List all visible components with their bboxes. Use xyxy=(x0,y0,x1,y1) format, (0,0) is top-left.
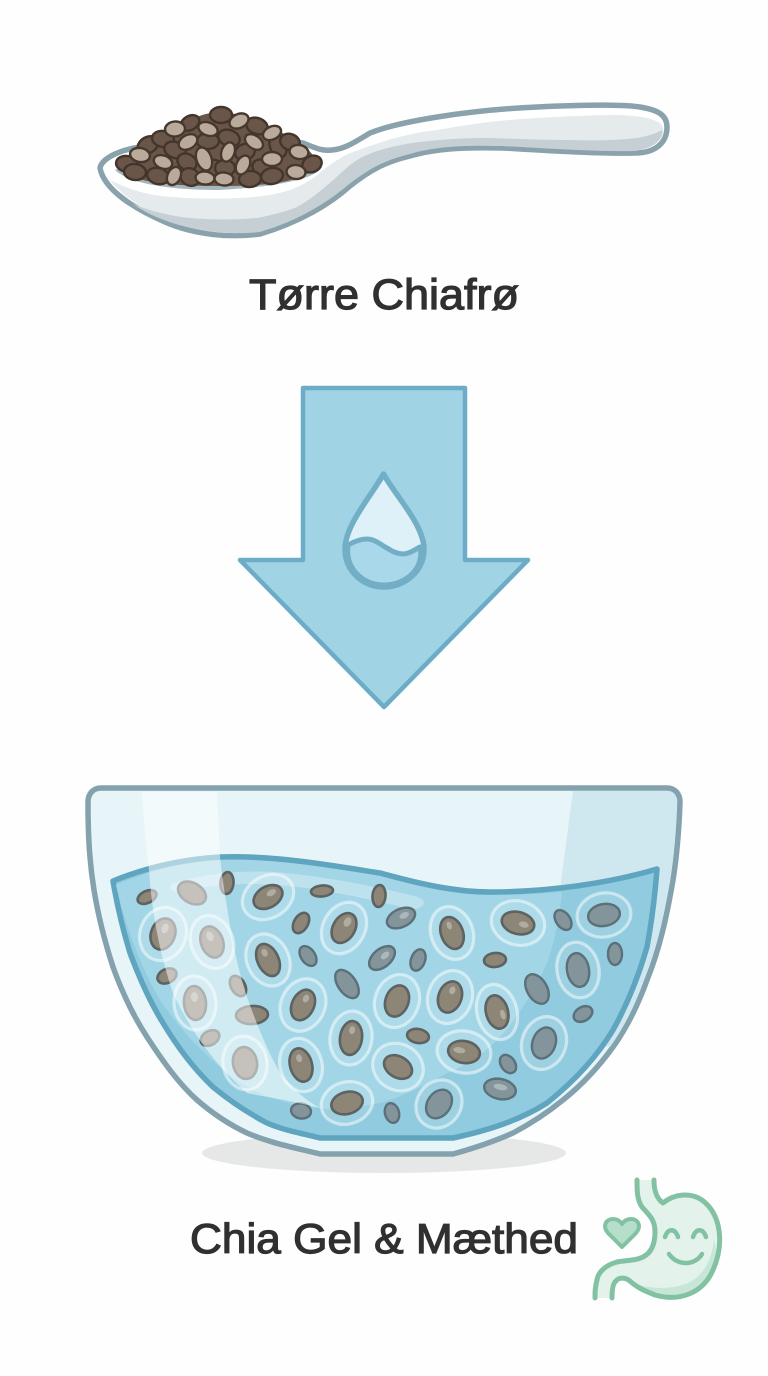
stomach shading xyxy=(624,1240,716,1296)
glass bowl with soaked chia seeds xyxy=(88,788,680,1154)
label: dry chia seeds: Tørre Chiafrø xyxy=(249,271,519,319)
dark seeds xyxy=(115,107,324,189)
smiling face xyxy=(665,1230,706,1263)
icon: happy stomach with heart xyxy=(595,1180,720,1298)
water surface highlight xyxy=(170,872,424,909)
spoon light shading xyxy=(110,115,663,233)
arrow with water drop xyxy=(240,388,528,707)
inner spoon bowl xyxy=(115,155,322,190)
bowl shadow xyxy=(202,1133,566,1173)
seed mound xyxy=(120,112,318,186)
glass tint right xyxy=(540,791,677,1047)
water light region xyxy=(116,860,562,1109)
glass highlight xyxy=(142,792,320,1108)
water drop icon xyxy=(345,474,424,587)
label: chia gel and satiety: Chia Gel & Mæthed xyxy=(190,1215,578,1262)
stomach xyxy=(595,1180,720,1298)
water xyxy=(113,857,657,1138)
stomach outline xyxy=(595,1180,720,1298)
light seeds xyxy=(129,110,310,187)
chia seeds with gel halos xyxy=(132,865,634,1137)
spoon darker shading xyxy=(133,130,662,233)
glass bowl xyxy=(88,788,680,1154)
spoon with dry chia seeds xyxy=(100,105,667,236)
down arrow xyxy=(240,388,528,707)
spoon body xyxy=(100,105,667,236)
heart xyxy=(605,1219,639,1247)
